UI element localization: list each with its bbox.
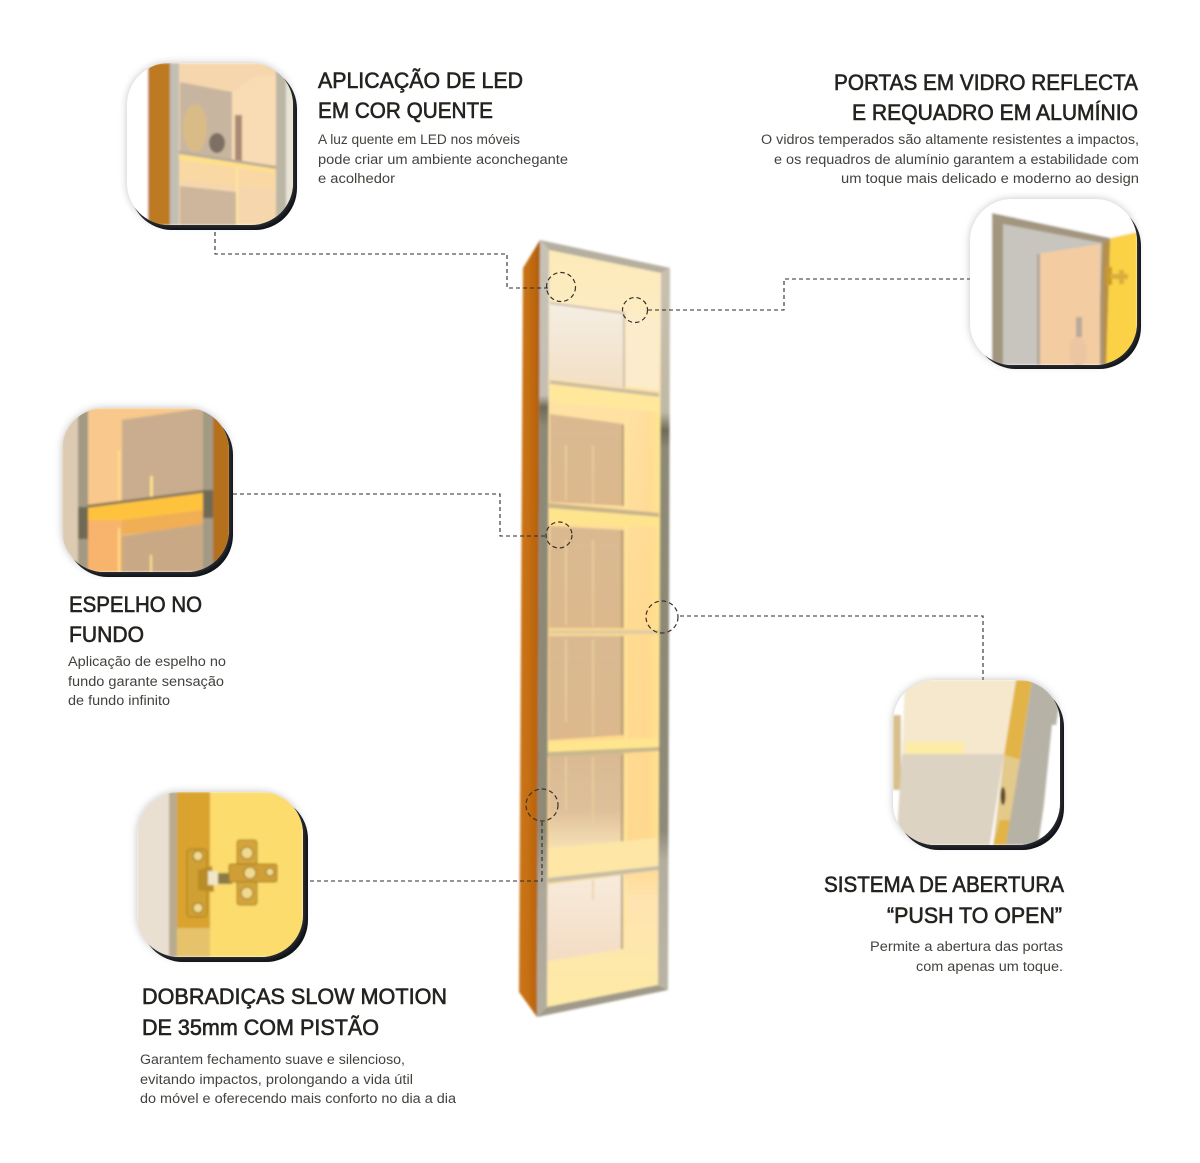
leader line: hinge	[310, 822, 542, 881]
hinge	[187, 840, 277, 917]
heading: hinge: DE 35mm COM PISTÃO	[142, 1015, 379, 1040]
heading: LED: APLICAÇÃO DE LED	[318, 68, 523, 93]
heading: mirror: FUNDO	[69, 622, 144, 647]
text: mirror: fundo garante sensação	[68, 674, 224, 689]
leader line: push to open	[680, 616, 983, 680]
heading: mirror: ESPELHO NO	[69, 592, 202, 617]
text: hinge: do móvel e oferecendo mais conforto no dia a dia	[140, 1091, 457, 1106]
cabinet illustration	[519, 240, 670, 1017]
text: LED: pode criar um ambiente aconchegante	[318, 152, 568, 167]
leader line: LED	[215, 232, 548, 288]
detail marker circles	[526, 272, 678, 821]
heading: push to open: “PUSH TO OPEN”	[887, 903, 1062, 928]
cabinet aluminium frame	[537, 240, 670, 1017]
cabinet shelves	[548, 380, 659, 883]
text: doors: um toque mais delicado e moderno ao design	[841, 171, 1139, 186]
text: doors: e os requadros de alumínio garantem a estabilidade com	[774, 152, 1139, 167]
text: push to open: Permite a abertura das portas	[870, 939, 1063, 954]
text: doors: O vidros temperados são altamente resistentes a impactos,	[761, 132, 1139, 147]
text: LED: e acolhedor	[318, 171, 396, 186]
leader line: door frame	[648, 279, 970, 310]
thumbnail: door frame detail	[970, 199, 1141, 369]
leader line: mirror	[233, 494, 546, 536]
cabinet side wood panel	[519, 240, 540, 1017]
heading: hinge: DOBRADIÇAS SLOW MOTION	[142, 984, 447, 1009]
thumbnail: LED detail	[127, 63, 297, 230]
text: push to open: com apenas um toque.	[916, 959, 1063, 974]
heading: doors: E REQUADRO EM ALUMÍNIO	[852, 100, 1138, 125]
text: hinge: Garantem fechamento suave e silencioso,	[140, 1052, 405, 1067]
text: mirror: de fundo infinito	[68, 693, 170, 708]
thumbnail: hinge detail	[137, 792, 308, 962]
heading: push to open: SISTEMA DE ABERTURA	[824, 872, 1064, 897]
text: LED: A luz quente em LED nos móveis	[318, 132, 520, 147]
cabinet interior	[547, 250, 661, 1007]
heading: doors: PORTAS EM VIDRO REFLECTA	[834, 70, 1138, 95]
thumbnail: push to open detail	[893, 680, 1064, 850]
heading: LED: EM COR QUENTE	[318, 98, 493, 123]
thumbnail: mirror detail	[62, 408, 233, 577]
text: hinge: evitando impactos, prolongando a vida útil	[140, 1072, 413, 1087]
text: mirror: Aplicação de espelho no	[68, 654, 226, 669]
